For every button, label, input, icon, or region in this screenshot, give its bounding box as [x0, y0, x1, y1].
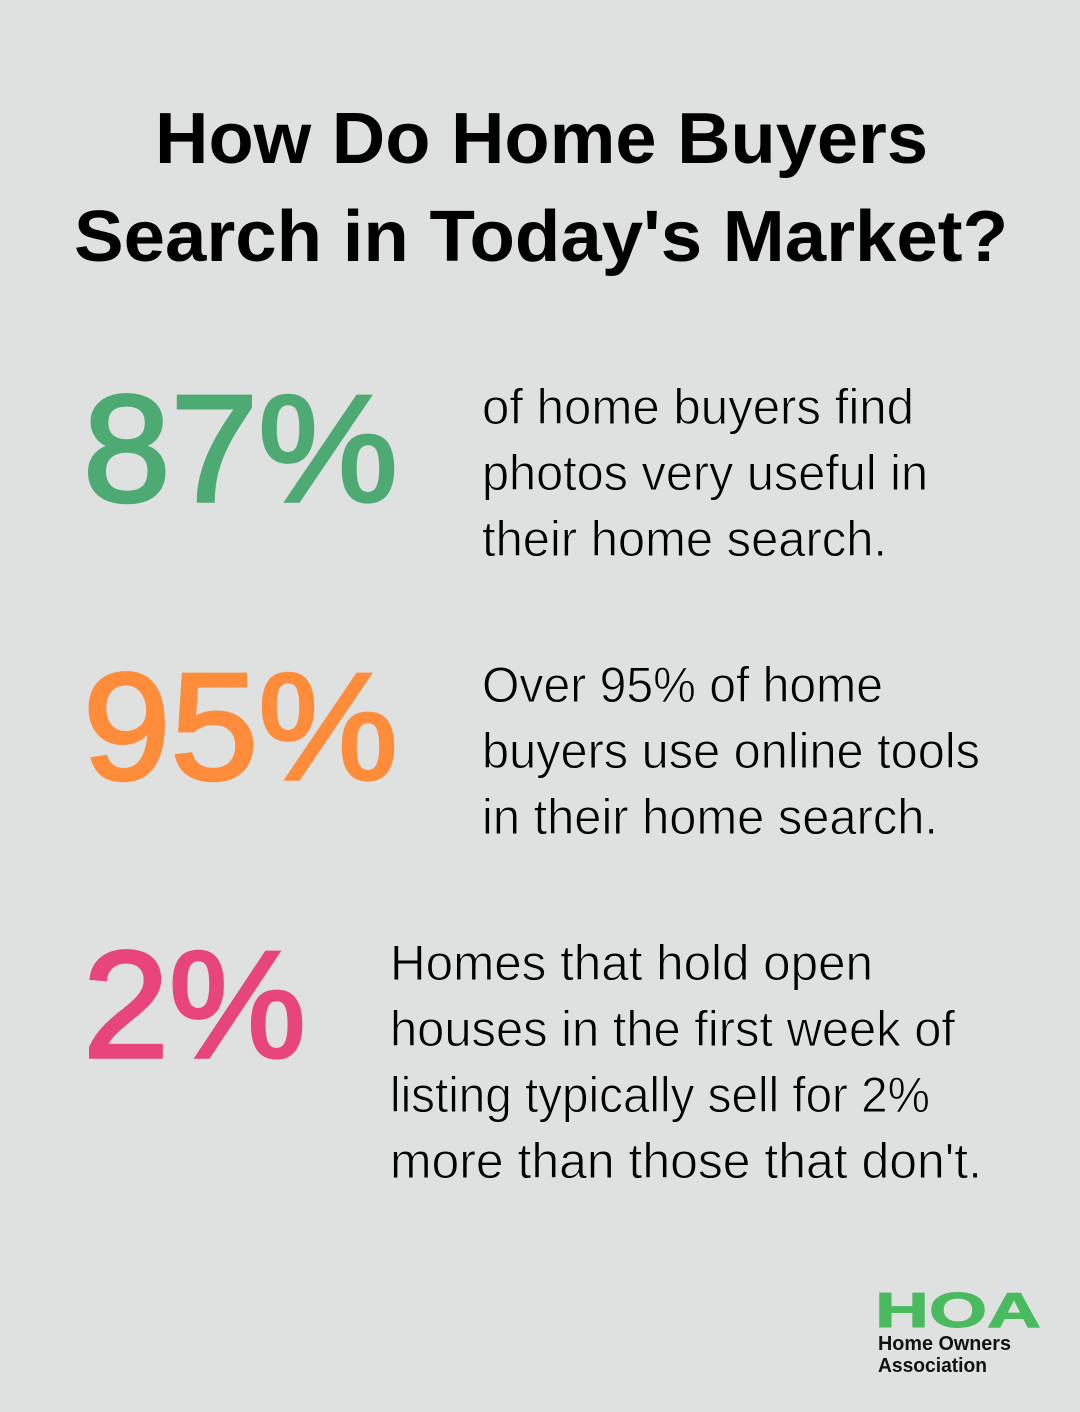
text block: open houses: Homes that hold open: [390, 935, 873, 991]
logo wordmark: Home Owners: [878, 1333, 1011, 1355]
text block: online tools: [482, 657, 980, 845]
text block: online tools: buyers use online tools: [482, 723, 980, 779]
text block: online tools: Over 95% of home: [482, 657, 883, 713]
logo wordmark: Association: [878, 1355, 987, 1377]
text block: photos: of home buyers find: [482, 379, 914, 435]
text block: open houses: listing typically sell for 2%: [390, 1067, 930, 1123]
text block: photos: their home search.: [482, 511, 887, 567]
stat number: 87%: 87%: [83, 364, 398, 534]
panel: 95% statistic: [83, 642, 980, 845]
title: How Do Home Buyers: [155, 99, 928, 179]
logo wordmark: [878, 1333, 1011, 1377]
title: [74, 99, 1008, 277]
panel: 2% statistic: [83, 920, 982, 1189]
text block: online tools: in their home search.: [482, 789, 938, 845]
title: Search in Today's Market?: [74, 197, 1008, 277]
text block: open houses: houses in the first week of: [390, 1001, 955, 1057]
logo: Home Owners Association: [875, 1284, 1041, 1377]
logo mark: HOA: HOA: [875, 1284, 1041, 1338]
stat number: 2%: 2%: [83, 920, 306, 1090]
panel: 87% statistic: [83, 364, 928, 567]
text block: photos: [482, 379, 928, 567]
stat number: 95%: 95%: [83, 642, 398, 812]
text block: open houses: more than those that don't.: [390, 1133, 982, 1189]
text block: photos: photos very useful in: [482, 445, 928, 501]
text block: open houses: [390, 935, 982, 1189]
